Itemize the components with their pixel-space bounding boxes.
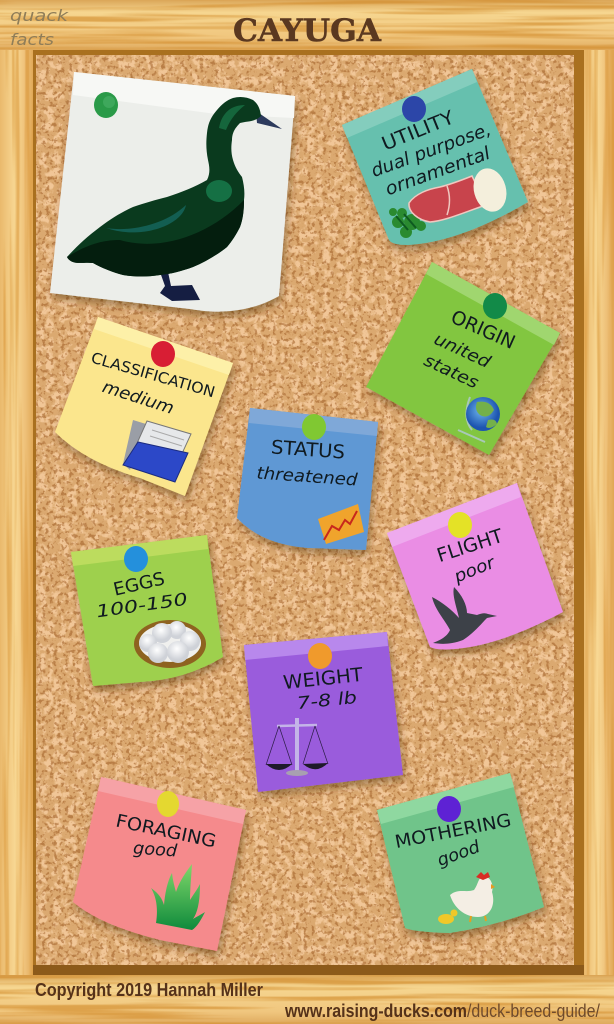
panel: weight note xyxy=(244,632,403,792)
panel: status note xyxy=(237,408,378,550)
text: 100-150: 100-150 xyxy=(95,590,189,622)
icon: rising chart xyxy=(318,504,364,544)
icon: blue pin xyxy=(402,96,426,122)
text: utility: UTILITY xyxy=(379,106,458,155)
text: united: united xyxy=(431,329,494,373)
panel: origin note xyxy=(366,262,560,455)
quack facts logo: quack xyxy=(10,6,69,25)
icon: blue folder xyxy=(123,420,191,482)
quack facts logo: facts xyxy=(10,30,54,49)
panel: flight note xyxy=(387,483,563,650)
icon: purple pin xyxy=(437,796,461,822)
text: origin: ORIGIN xyxy=(447,306,519,354)
panel: classification note xyxy=(55,317,233,496)
text: flight: FLIGHT xyxy=(434,525,506,567)
text: dual purpose: dual purpose, xyxy=(368,119,494,182)
text: poor: poor xyxy=(450,553,499,588)
icon: nest of eggs xyxy=(134,620,206,668)
panel: utility note xyxy=(342,69,528,245)
illustration: cayuga duck xyxy=(67,97,282,301)
icon: flying duck silhouette xyxy=(432,587,497,644)
text: status: STATUS xyxy=(270,436,346,464)
icon: green pin xyxy=(94,92,118,118)
text: good: good xyxy=(132,838,178,862)
title: CAYUGA xyxy=(233,13,382,49)
text: ornamental: ornamental xyxy=(383,143,493,200)
icon: lime pin xyxy=(302,414,326,440)
text: foraging: FORAGING xyxy=(114,811,218,852)
icon: yellow pin xyxy=(448,512,472,538)
icon: blue pin xyxy=(124,546,148,572)
text: states: states xyxy=(420,351,482,393)
cork board xyxy=(36,55,574,965)
icon: orange pin xyxy=(308,643,332,669)
icon: hen and chick xyxy=(438,872,495,924)
text: medium: medium xyxy=(100,377,176,419)
text: weight: WEIGHT xyxy=(282,664,364,694)
text: classification: CLASSIFICATION xyxy=(89,349,217,401)
icon: green pin xyxy=(483,293,507,319)
panel: eggs note xyxy=(71,535,223,686)
quack facts logo xyxy=(10,6,69,49)
panel: mothering note xyxy=(377,773,544,933)
icon: globe xyxy=(458,397,500,442)
icon: red pin xyxy=(151,341,175,367)
text: 7-8 lb: 7-8 lb xyxy=(296,688,358,714)
icon: meat, egg and parsley xyxy=(389,165,511,238)
panel: foraging note xyxy=(73,777,246,951)
text: mothering: MOTHERING xyxy=(393,810,513,853)
copyright line: Copyright 2019 Hannah Miller xyxy=(35,980,263,1000)
website url: www.raising-ducks.com/duck-breed-guide/ xyxy=(284,1001,600,1021)
text: eggs: EGGS xyxy=(111,568,167,601)
icon: yellow pin xyxy=(157,791,179,817)
panel: duck photo note xyxy=(50,72,295,312)
text: good: good xyxy=(435,837,483,871)
icon: grass tuft xyxy=(151,864,205,930)
icon: balance scale xyxy=(266,718,328,776)
text: threatened: threatened xyxy=(256,464,358,491)
